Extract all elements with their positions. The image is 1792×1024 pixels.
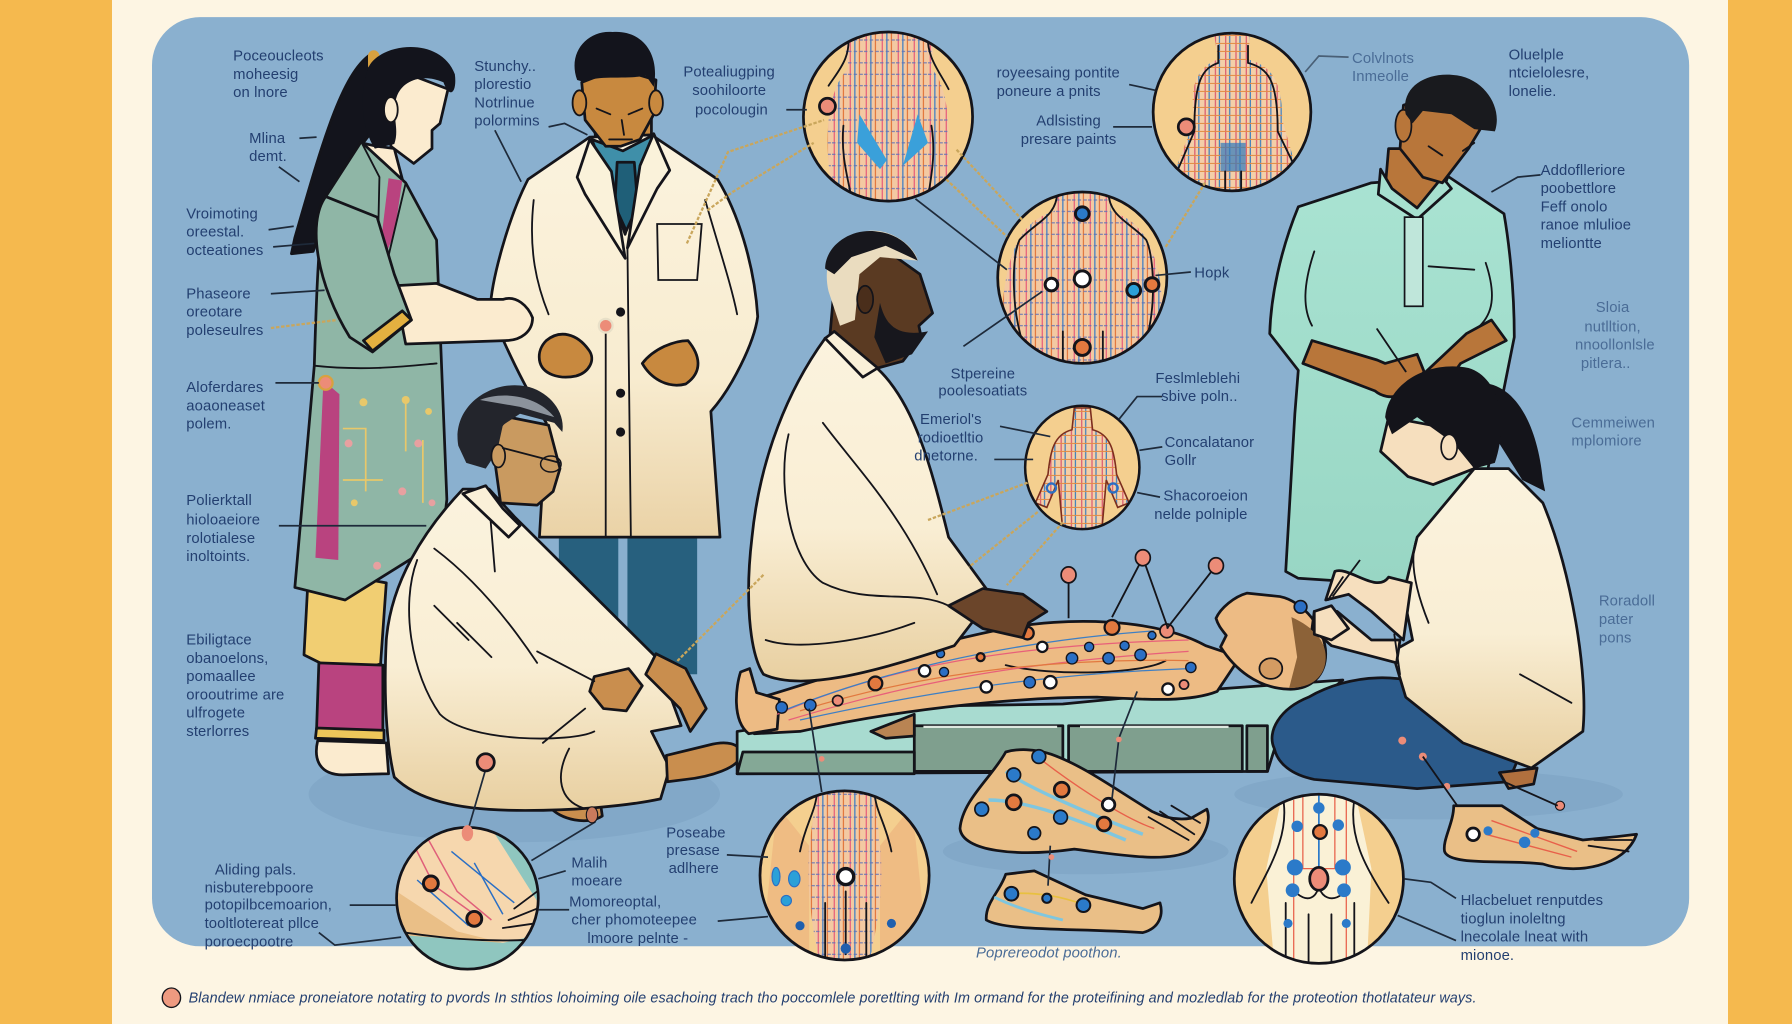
label: inset 3 below: Stpereine [951, 366, 1015, 382]
label: right lower [1571, 415, 1655, 450]
label: right foot area: pater [1599, 612, 1633, 628]
label: top left 1: Poceoucleots [233, 49, 324, 65]
label: top right: Oluelple [1509, 47, 1564, 63]
label: inset 1 [683, 65, 807, 118]
legend caption: Blandew nmiace proneiatore notatirg to pvords In sthtios lohoiming oile esachoing trach tho poccomlele poretlting with Im ormand for the proteifining and mozledlab for the proteotion thotlatateur ways. [189, 990, 1477, 1006]
label: inset 7: tioglun inoleltng [1461, 911, 1566, 927]
figure: kneeling woman [1272, 366, 1584, 789]
label: inset 5 right [538, 855, 622, 910]
label: inset 7 [1398, 879, 1603, 964]
label: dress 4 [186, 493, 426, 565]
label: dress 4: Polierktall [186, 493, 252, 509]
label: right foot area [1599, 594, 1655, 646]
label: left lower: obanoelons, [186, 651, 268, 667]
label: dress 1: octeationes [186, 243, 263, 259]
label: inset 5 right: Malih [571, 855, 607, 871]
label: inset 3 below: poolesoatiats [938, 383, 1027, 399]
label: mint tunic: Feff onolo [1541, 199, 1607, 215]
circle inset: hips [760, 789, 929, 966]
circle inset: small full body [1025, 406, 1139, 531]
label: left lower: ulfrogete [186, 706, 245, 722]
label: left lower: orooutrime are [186, 687, 284, 703]
label: right middle: pitlera.. [1581, 356, 1631, 372]
label: inset 4 left: dnetorne. [914, 449, 978, 465]
label: inset 5 and 6 between: Momoreoptal, [569, 894, 661, 910]
label: inset 7: Hlacbeluet renputdes [1461, 893, 1603, 909]
label: left lower [186, 633, 284, 740]
label: lab coat: polormins [474, 114, 540, 130]
label: inset 2 upper [997, 66, 1155, 100]
foot illustration: small [986, 871, 1161, 933]
label: inset 6 upper: presase [666, 843, 720, 859]
label: inset 5 left: potopilbcemoarion, [205, 898, 332, 914]
label: dress 3 [186, 380, 319, 433]
pins above patient [1061, 550, 1223, 629]
label: top right: lonelie. [1509, 84, 1557, 100]
floor shadows [309, 746, 1623, 874]
acupressure points on patient [776, 620, 1196, 713]
label: inset 6 upper: adlhere [669, 861, 719, 877]
figure: seated elder with glasses [385, 385, 741, 821]
label: lab coat [474, 59, 587, 182]
label: inset 5 left [205, 862, 401, 950]
label: inset 4 lower right [1137, 489, 1248, 523]
label: dress 1: oreestal. [186, 225, 244, 241]
label: hair: Mlina [249, 131, 285, 147]
label: inset 1: soohiloorte [692, 83, 766, 99]
label: inset 4 lower right: Shacoroeion [1163, 489, 1248, 505]
label: mint tunic: meliontte [1541, 236, 1602, 252]
label: dress 3: aoaoneaset [186, 398, 266, 414]
label: inset 2 right: Inmeolle [1352, 69, 1409, 85]
foot illustration: large [960, 750, 1208, 857]
label: inset 2 lower: Adlsisting [1036, 114, 1101, 130]
label: right lower: Cemmeiwen [1571, 415, 1655, 431]
circle inset: lower back and legs [1234, 794, 1403, 966]
hand on patient temple with blue point [1294, 560, 1360, 640]
label: dress 2: Phaseore [186, 286, 251, 302]
label: inset 4 upper right [1119, 371, 1240, 419]
label: inset 7: mionoe. [1461, 948, 1514, 964]
label: inset 4 left: Emeriol's [920, 412, 982, 428]
point markers on kneeling woman's leg [1398, 737, 1565, 822]
label: inset 2 lower: presare paints [1021, 132, 1116, 148]
label: inset 4 left [914, 412, 1050, 465]
foot illustration: right [1444, 806, 1637, 869]
label: top left 1: on lnore [233, 85, 288, 101]
label: foot caption: Poprereodot poothon. [976, 946, 1122, 962]
label: inset 1: pocolougin [695, 102, 768, 118]
circle inset: torso front [803, 32, 973, 201]
label: hair: demt. [249, 149, 287, 165]
figure: woman in patterned dress [291, 47, 455, 775]
label: inset 5 left: poroecpootre [205, 934, 293, 950]
label: inset 2 upper: royeesaing pontite [997, 66, 1120, 82]
label: dress 1: Vroimoting [186, 206, 258, 222]
label: inset 2 lower [1021, 114, 1152, 148]
label: top left 1: moheesig [233, 67, 298, 83]
label: lab coat: plorestio [474, 77, 531, 93]
label: inset 5 left: tooltlotereat pllce [205, 916, 319, 932]
circle inset: standing body [1153, 33, 1311, 194]
label: right middle [1575, 300, 1655, 372]
label: inset 1: Potealiugping [683, 65, 775, 81]
label: dress 2: poleseulres [186, 323, 263, 339]
connector lines between insets and figures [462, 120, 1206, 886]
label: inset 5 and 6 between [569, 894, 768, 947]
label: inset 6 upper [666, 826, 768, 877]
label: inset 5 right: moeare [571, 874, 622, 890]
label: inset 3 right [1155, 266, 1230, 282]
label: lab coat: Notrlinue [474, 95, 535, 111]
label: hair [249, 131, 317, 182]
label: mint tunic: ranoe mlulioe [1541, 218, 1631, 234]
label: inset 6 upper: Poseabe [666, 826, 726, 842]
label: dress 3: Aloferdares [186, 380, 263, 396]
figure: bench [737, 680, 1343, 774]
label: dress 1 [186, 206, 314, 259]
label: inset 2 right [1305, 51, 1414, 85]
figure: woman's arm and sleeve reaching to the lab coat [316, 197, 533, 352]
label: top right: ntcielolesre, [1509, 66, 1589, 82]
legend marker [162, 988, 181, 1007]
label: inset 4 upper right: Feslmleblehi [1155, 371, 1240, 387]
figure: seated man with white-streaked hair [749, 231, 1047, 681]
label: top right [1509, 47, 1589, 100]
label: dress 3: polem. [186, 417, 232, 433]
label: inset 4 right: Concalatanor [1165, 435, 1254, 451]
label: top left 1 [233, 49, 324, 101]
label: inset 5 and 6 between: lmoore pelnte - [587, 931, 688, 947]
label: inset 2 right: Colvlnots [1352, 51, 1414, 67]
label: right lower: mplomiore [1571, 434, 1642, 450]
label: left lower: pomaallee [186, 669, 256, 685]
figure: man in white lab coat [490, 32, 758, 680]
circle inset: ankle [397, 827, 538, 969]
circle inset: back and torso [998, 189, 1167, 366]
label: inset 5 and 6 between: cher phomoteepee [571, 913, 697, 929]
figure: man in mint tunic [1270, 75, 1514, 587]
label: inset 4 lower right: nelde polniple [1154, 507, 1248, 523]
label: left lower: Ebiligtace [186, 633, 252, 649]
label: mint tunic: poobettlore [1541, 181, 1616, 197]
label: right middle: nutlltion, [1584, 319, 1641, 335]
label: right middle: Sloia [1596, 300, 1629, 316]
label: inset 7: lnecolale lneat with [1461, 930, 1588, 946]
label: dress 4: inoltoints. [186, 549, 250, 565]
label: inset 2 upper: poneure a pnits [997, 84, 1101, 100]
label: dress 4: rolotialese [186, 531, 255, 547]
label: inset 4 right: Gollr [1165, 453, 1196, 469]
label: mint tunic [1491, 163, 1631, 252]
label: inset 5 left: nisbuterebpoore [205, 881, 314, 897]
label: lab coat: Stunchy.. [474, 59, 536, 75]
label: mint tunic: Addoflleriore [1541, 163, 1625, 179]
label: inset 5 left: Aliding pals. [215, 862, 296, 878]
label: inset 4 upper right: sbive poln.. [1161, 389, 1238, 405]
label: dress 2 [186, 286, 337, 339]
label: dress 4: hioloaeiore [186, 513, 260, 529]
label: inset 4 right [1139, 435, 1254, 469]
blue panel [152, 17, 1689, 946]
label: dress 2: oreotare [186, 305, 242, 321]
label: inset 3 below [938, 366, 1027, 399]
label: left lower: sterlorres [186, 724, 249, 740]
figure: reclining patient [736, 593, 1326, 738]
label: right foot area: Roradoll [1599, 594, 1655, 610]
label: right middle: nnoollonlsle [1575, 338, 1655, 354]
label: inset 3 right: Hopk [1194, 266, 1230, 282]
label: right foot area: pons [1599, 630, 1632, 646]
label: inset 4 left: rodioetltio [918, 430, 983, 446]
